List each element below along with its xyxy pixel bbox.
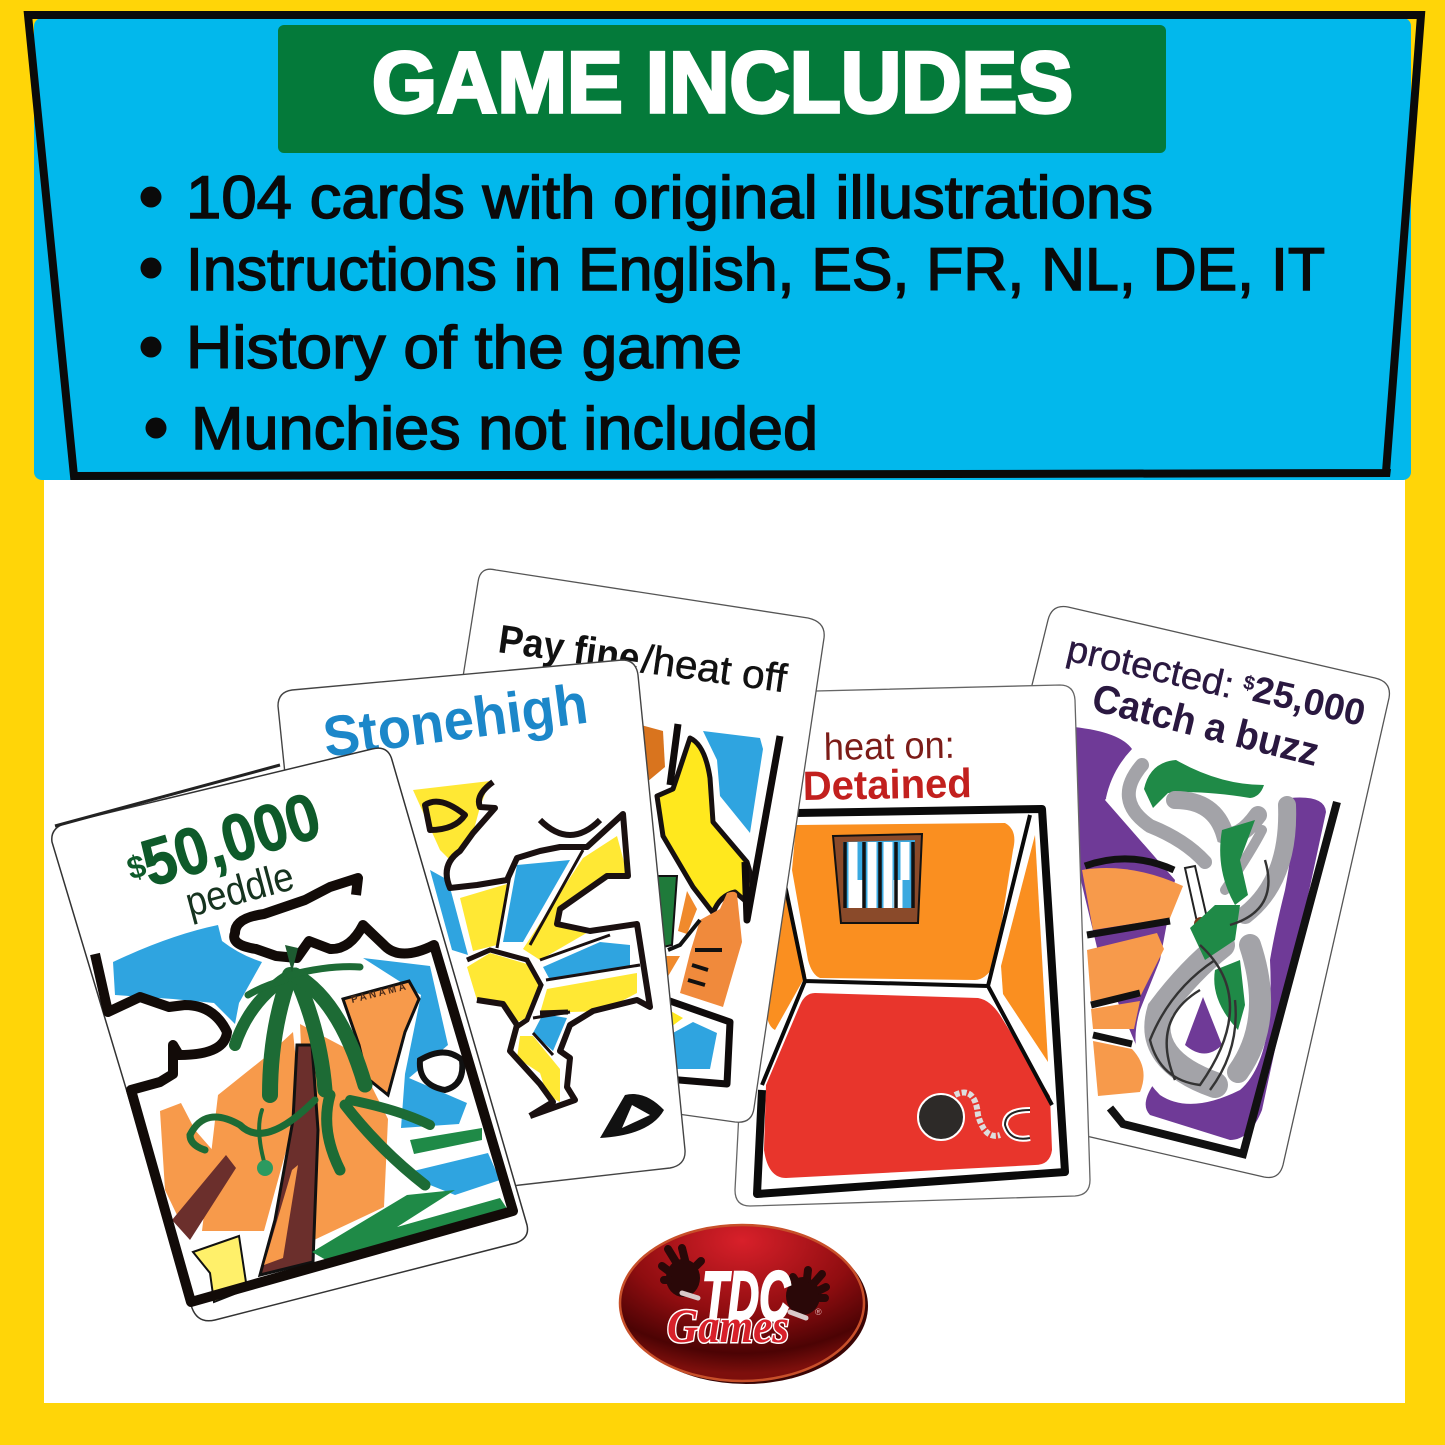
left hand <box>662 1248 701 1298</box>
frame <box>655 724 780 1084</box>
yellow wedge left <box>20 18 34 135</box>
peddle label: peddle <box>180 853 299 926</box>
right orange land <box>300 1024 388 1240</box>
white card area <box>44 470 1405 1403</box>
window <box>833 834 922 923</box>
purple background <box>1074 727 1326 1140</box>
bullet: munchies: Munchies not included <box>191 395 818 462</box>
card: heat on detained <box>735 685 1090 1206</box>
ball and chain <box>918 1092 1030 1140</box>
trunk <box>260 1045 318 1275</box>
cell back wall <box>792 823 1014 980</box>
coconut <box>257 1160 273 1176</box>
green band <box>410 1128 482 1154</box>
heading banner <box>278 25 1166 153</box>
yellow shape <box>193 1236 247 1302</box>
clouds outline <box>425 782 650 1116</box>
card 3 title text: Pay fine <box>496 617 642 681</box>
card: pay fine heat off <box>400 569 824 1122</box>
sea <box>363 958 467 1128</box>
card 4 heat on text: heat on: <box>823 725 955 769</box>
registered mark: ® <box>815 1307 822 1317</box>
panel outline <box>28 15 1421 476</box>
card 4 detained text: Detained <box>802 760 972 809</box>
hand fingers <box>1082 868 1183 930</box>
smoke halo <box>1105 751 1292 1104</box>
card frame line <box>1110 802 1337 1154</box>
ruin orange <box>160 1103 222 1215</box>
smoke lines <box>1150 860 1268 1090</box>
left orange land <box>202 1032 300 1231</box>
right wall <box>1001 835 1048 1062</box>
card: pay fine heat off: /heat off <box>639 637 790 701</box>
orange patch mid <box>678 891 697 934</box>
palm leaves <box>190 967 430 1185</box>
yellow small <box>660 1005 683 1035</box>
orange patch low <box>652 956 680 980</box>
trunk stripe <box>264 1165 298 1265</box>
cigarette tip <box>1194 917 1208 931</box>
volcano top <box>285 945 298 972</box>
card 1 price: 50,000 <box>133 778 328 900</box>
card: 50000 peddle <box>52 748 528 1321</box>
cell frame <box>757 809 1065 1194</box>
green ground <box>312 1190 508 1260</box>
spade mark <box>600 1094 664 1138</box>
card: stonehigh <box>278 660 685 1210</box>
finger lines <box>668 920 722 985</box>
sun outline <box>467 950 568 1028</box>
heading banner: GAME INCLUDES <box>372 35 1073 131</box>
cigarette <box>1185 866 1207 922</box>
card: protected catch a buzz: $ <box>1241 672 1257 696</box>
logo: TDC Games <box>620 1225 868 1384</box>
orange patch <box>630 722 665 785</box>
card 5 title text: Catch a buzz <box>1088 676 1324 775</box>
second trunk <box>172 1155 236 1240</box>
sun ray lines <box>497 850 640 1055</box>
green bills <box>640 876 677 950</box>
sky <box>113 925 262 1024</box>
TDC wordmark: TDC <box>702 1257 791 1335</box>
card: protected catch a buzz: 25,000 <box>1249 668 1369 734</box>
smoke <box>1129 765 1287 1085</box>
blue top <box>703 731 763 833</box>
flame <box>657 738 752 913</box>
cell lines <box>762 815 1052 1105</box>
bullet: instructions: Instructions in English, ES, FR, NL, DE, IT <box>186 236 1325 303</box>
yellow wedge right <box>1411 18 1428 135</box>
sunburst <box>413 781 637 1102</box>
panel: game includes <box>20 15 1428 480</box>
panama label: PANAMA <box>350 982 407 1006</box>
logo shadow <box>624 1228 868 1384</box>
Games wordmark: Games <box>667 1300 789 1353</box>
hand <box>680 892 742 1007</box>
right hand <box>786 1270 826 1318</box>
lower water <box>405 1153 500 1195</box>
red floor <box>764 993 1052 1178</box>
bullet: history: History of the game <box>186 314 742 381</box>
top edge shadow line <box>55 765 280 826</box>
green patch <box>1144 760 1264 808</box>
green smoke patches <box>1190 820 1255 1030</box>
panama orange <box>343 981 419 1095</box>
finger lines <box>1085 859 1174 1044</box>
purple teardrop <box>1185 997 1222 1054</box>
bullet: cards: 104 cards with original illustrations <box>186 164 1153 231</box>
bean mark <box>420 1052 462 1090</box>
frame and clouds <box>95 878 513 1302</box>
dollar sign: $ <box>123 847 150 887</box>
logo oval <box>620 1225 864 1381</box>
left wall <box>766 890 806 1030</box>
card 2 title: Stonehigh <box>319 672 591 770</box>
blue bottom <box>660 1022 717 1069</box>
card 5 value text: protected: <box>1063 628 1238 706</box>
card: protected catch a buzz <box>930 607 1389 1178</box>
blue panel background <box>34 18 1411 480</box>
